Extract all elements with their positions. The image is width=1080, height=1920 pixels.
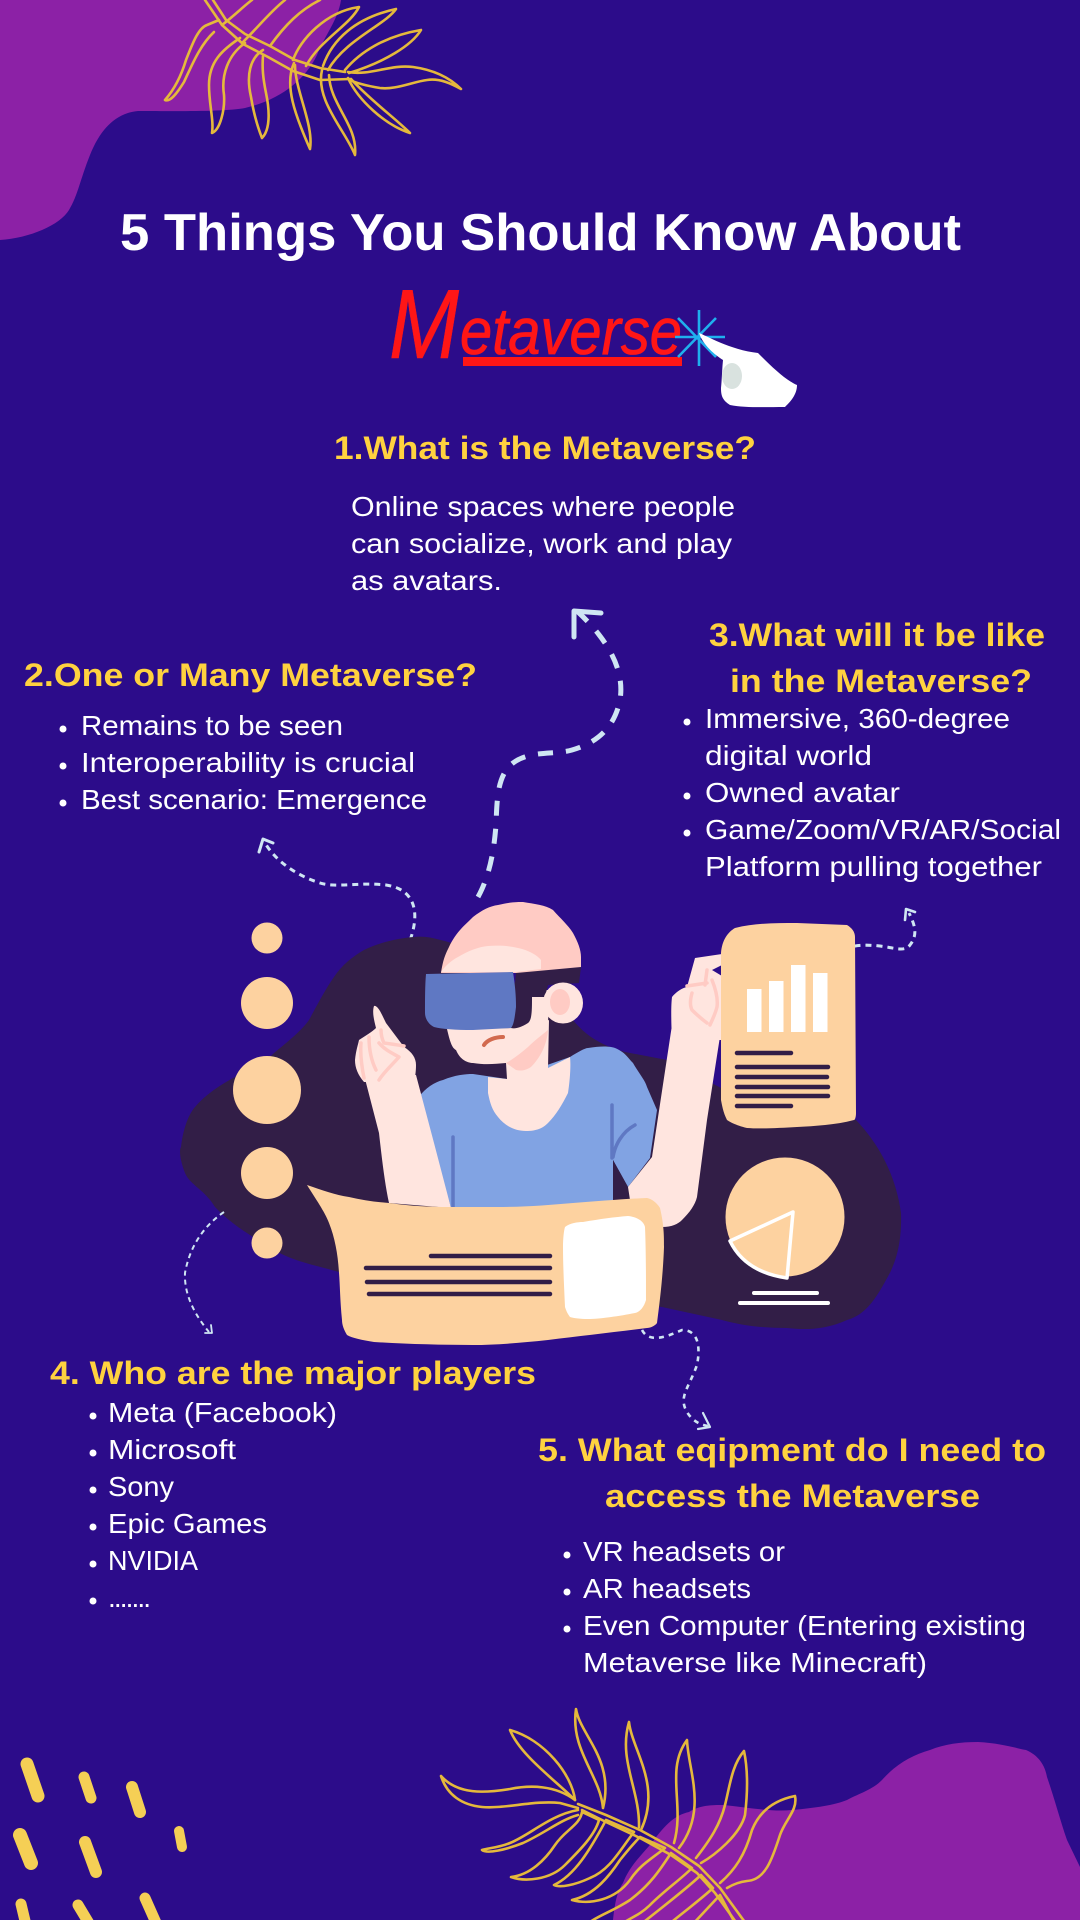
bullet list 4: Sony (108, 1471, 174, 1502)
title: Metaverse wordmark: etaverse (460, 294, 682, 368)
text lines (737, 1053, 828, 1106)
arrow: dotted to section 2 (259, 839, 415, 950)
shirt (419, 1046, 657, 1208)
arrow: dotted to section 3 (836, 909, 915, 957)
bullet list 2: Remains to be seen (81, 710, 343, 741)
bullet list 4: NVIDIA (108, 1545, 198, 1576)
bullet list 2 (60, 710, 427, 815)
bullet list 2: Best scenario: Emergence (81, 784, 427, 815)
bullet list 3: Immersive, 360-degree (705, 703, 1010, 734)
icon: top palm leaf (165, 0, 461, 155)
heading 3: in the Metaverse? (730, 663, 1032, 699)
shirt fold lines (453, 1105, 635, 1207)
bullet list 4: Meta (Facebook) (108, 1397, 337, 1428)
heading 5: 5. What eqipment do I need to (538, 1432, 1046, 1468)
VR visor (425, 972, 516, 1030)
illustration: person with VR headset (180, 902, 901, 1345)
title: 5 Things You Should Know About (120, 204, 961, 262)
bullet list 3 (684, 703, 1061, 882)
icon: pointing hand with sparkle (675, 310, 797, 407)
bullet list 5: Even Computer (Entering existing (583, 1610, 1026, 1641)
bullet list 4 (90, 1397, 337, 1613)
heading 4: 4. Who are the major players (50, 1355, 536, 1391)
bullet list 3: Game/Zoom/VR/AR/Social (705, 814, 1061, 845)
title: Metaverse wordmark (389, 269, 682, 379)
body text 1 (351, 491, 735, 596)
section 2: one or many (24, 657, 477, 815)
title: Metaverse wordmark: M (389, 269, 459, 379)
blob: bottom-right purple (613, 1742, 1080, 1920)
section 5: equipment (538, 1432, 1046, 1678)
right panel: bar chart and text lines (721, 923, 856, 1128)
neck and chest (488, 1020, 570, 1131)
arrow: dotted to section 5 (642, 1330, 710, 1429)
pink cap (441, 902, 581, 973)
body text 1: as avatars. (351, 565, 502, 596)
section 1: what is the metaverse (334, 430, 756, 596)
bullet list 5: VR headsets or (583, 1536, 785, 1567)
column of dots (233, 922, 301, 1258)
cap highlight (441, 946, 541, 972)
pie chart panel (726, 1158, 844, 1303)
white card (563, 1216, 646, 1319)
bullet list 3: Platform pulling together (705, 851, 1042, 882)
bullet list 3: Owned avatar (705, 777, 900, 808)
section 3: what will it be like (684, 617, 1061, 882)
arrow: dotted to section 4 (185, 1212, 224, 1333)
bars (747, 965, 828, 1032)
bottom panel (307, 1185, 664, 1345)
heading 5 (538, 1432, 1046, 1514)
bullet list 2: Interoperability is crucial (81, 747, 415, 778)
face (447, 990, 549, 1064)
dark background blob (180, 937, 901, 1329)
torso gap shadow (613, 1160, 632, 1208)
decoration: yellow brush dashes (20, 1764, 182, 1920)
mouth (484, 1037, 503, 1045)
heading 5: access the Metaverse (605, 1478, 980, 1514)
heading 3: 3.What will it be like (709, 617, 1045, 653)
left arm and pointing hand (355, 1006, 451, 1208)
section 4: major players (50, 1355, 536, 1613)
bullet list 4: Epic Games (108, 1508, 267, 1539)
icon: bottom palm leaf (441, 1709, 795, 1920)
bullet list 4: ....... (108, 1582, 151, 1613)
bullet list 4: Microsoft (108, 1434, 236, 1465)
right arm and hand (628, 954, 722, 1227)
dark strap and hair (511, 967, 581, 1028)
ear (543, 982, 583, 1024)
heading 1: 1.What is the Metaverse? (334, 430, 756, 466)
heading 2: 2.One or Many Metaverse? (24, 657, 477, 693)
bullet list 3: digital world (705, 740, 872, 771)
heading 3 (709, 617, 1045, 699)
text lines (366, 1256, 550, 1294)
bullet list 5: Metaverse like Minecraft) (583, 1647, 927, 1678)
body text 1: can socialize, work and play (351, 528, 732, 559)
neck shadow (506, 1030, 548, 1071)
bullet list 5 (564, 1536, 1026, 1678)
bullet list 5: AR headsets (583, 1573, 751, 1604)
arrow: big dashed to section 1 (478, 611, 621, 897)
blob: top-left purple (0, 0, 341, 240)
body text 1: Online spaces where people (351, 491, 735, 522)
